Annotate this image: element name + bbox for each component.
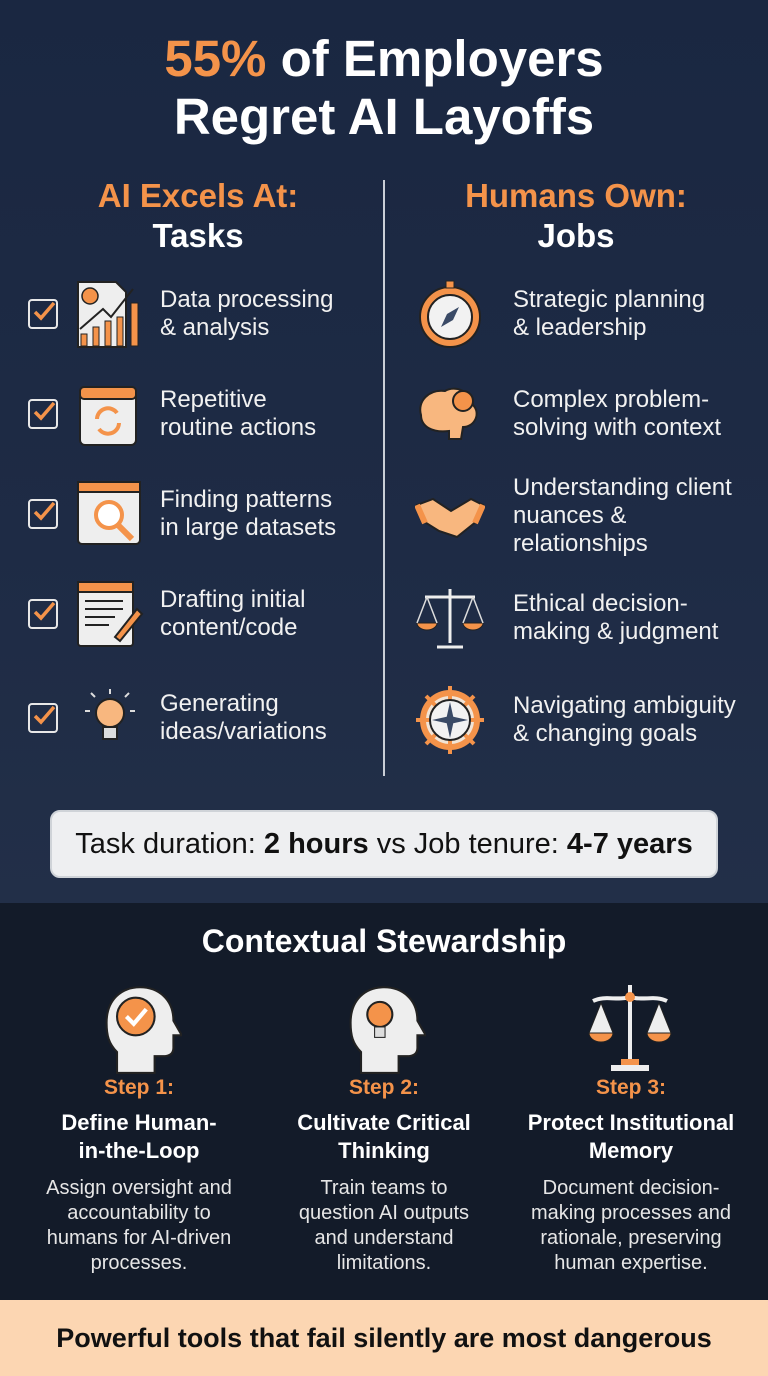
row: client nuances xyxy=(415,474,732,557)
row: repetitive actions: Repetitive xyxy=(160,386,267,413)
row: complex problem solving xyxy=(419,386,721,441)
row: strategic planning: & leadership xyxy=(513,314,646,341)
icon: head with check xyxy=(106,986,182,1074)
row: ethical decision xyxy=(416,589,718,648)
heading: AI excels at tasks: AI Excels At: xyxy=(98,177,298,214)
step 2: limitations. xyxy=(337,1252,431,1274)
step 3: making processes and xyxy=(531,1202,731,1224)
row: repetitive actions xyxy=(28,386,316,446)
step 2: question AI outputs xyxy=(299,1202,469,1224)
step 2: Step 2: xyxy=(349,1076,419,1099)
step 2: Thinking xyxy=(338,1138,430,1163)
step 3: Protect Institutional xyxy=(528,1110,734,1135)
row: data processing: Data processing xyxy=(160,286,333,313)
callout: task duration vs job tenure xyxy=(50,810,718,878)
row: generating ideas: ideas/variations xyxy=(160,718,327,745)
step 1: processes. xyxy=(91,1252,187,1274)
heading: contextual stewardship: Contextual Stewardship xyxy=(202,923,566,959)
row: complex problem solving: Complex problem- xyxy=(513,386,709,413)
row: client nuances: relationships xyxy=(513,530,648,557)
step 1 xyxy=(46,1076,232,1274)
icon: scales xyxy=(588,985,672,1071)
heading: humans own jobs xyxy=(465,177,687,254)
icon: head with lightbulb xyxy=(350,986,426,1074)
row: client nuances: nuances & xyxy=(513,502,626,529)
title: Regret AI Layoffs xyxy=(174,88,594,145)
row: ethical decision: Ethical decision- xyxy=(513,590,688,617)
row: finding patterns xyxy=(28,481,336,545)
panel: human jobs list xyxy=(415,280,736,754)
callout: task duration vs job tenure: Task duration: 2 hours vs Job tenure: 4-7 years xyxy=(75,828,693,860)
row: generating ideas: Generating xyxy=(160,690,279,717)
panel: AI tasks list xyxy=(28,281,336,745)
row: strategic planning: Strategic planning xyxy=(513,286,705,313)
row: navigating ambiguity xyxy=(416,686,736,754)
step 1: Assign oversight and xyxy=(46,1177,232,1199)
heading: AI excels at tasks xyxy=(98,177,298,254)
step 2: Cultivate Critical xyxy=(297,1110,471,1135)
row: ethical decision: making & judgment xyxy=(513,618,718,645)
row: drafting content xyxy=(28,581,305,647)
step 2: Train teams to xyxy=(320,1177,448,1199)
row: drafting content: content/code xyxy=(160,614,297,641)
step 2: and understand xyxy=(314,1227,454,1249)
row: strategic planning xyxy=(419,280,705,348)
title xyxy=(164,30,604,145)
heading: humans own jobs: Humans Own: xyxy=(465,177,687,214)
row: data processing: & analysis xyxy=(160,314,269,341)
row: generating ideas xyxy=(28,689,327,745)
row: navigating ambiguity: & changing goals xyxy=(513,720,697,747)
row: complex problem solving: solving with context xyxy=(513,414,721,441)
row: drafting content: Drafting initial xyxy=(160,586,305,613)
step 1: humans for AI-driven xyxy=(47,1227,231,1249)
title: 55% of Employers xyxy=(164,30,604,87)
step 2 xyxy=(297,1076,471,1274)
panel: contextual stewardship xyxy=(0,903,768,1300)
heading: AI excels at tasks: Tasks xyxy=(152,217,244,254)
row: finding patterns: Finding patterns xyxy=(160,486,332,513)
row: finding patterns: in large datasets xyxy=(160,514,336,541)
step 3 xyxy=(528,1076,734,1274)
step 1: in-the-Loop xyxy=(79,1138,199,1163)
banner: conclusion: Powerful tools that fail silently are most dangerous xyxy=(56,1323,712,1353)
step 3: Document decision- xyxy=(543,1177,719,1199)
step 1: accountability to xyxy=(67,1202,211,1224)
step 3: human expertise. xyxy=(554,1252,708,1274)
heading: humans own jobs: Jobs xyxy=(537,217,615,254)
step 1: Step 1: xyxy=(104,1076,174,1099)
step 3: Memory xyxy=(589,1138,673,1163)
row: data processing xyxy=(28,281,333,348)
step 1: Define Human- xyxy=(61,1110,217,1135)
row: client nuances: Understanding client xyxy=(513,474,732,501)
row: repetitive actions: routine actions xyxy=(160,414,316,441)
row: navigating ambiguity: Navigating ambiguity xyxy=(513,692,736,719)
step 3: Step 3: xyxy=(596,1076,666,1099)
step 3: rationale, preserving xyxy=(540,1227,722,1249)
banner: conclusion xyxy=(0,1300,768,1376)
